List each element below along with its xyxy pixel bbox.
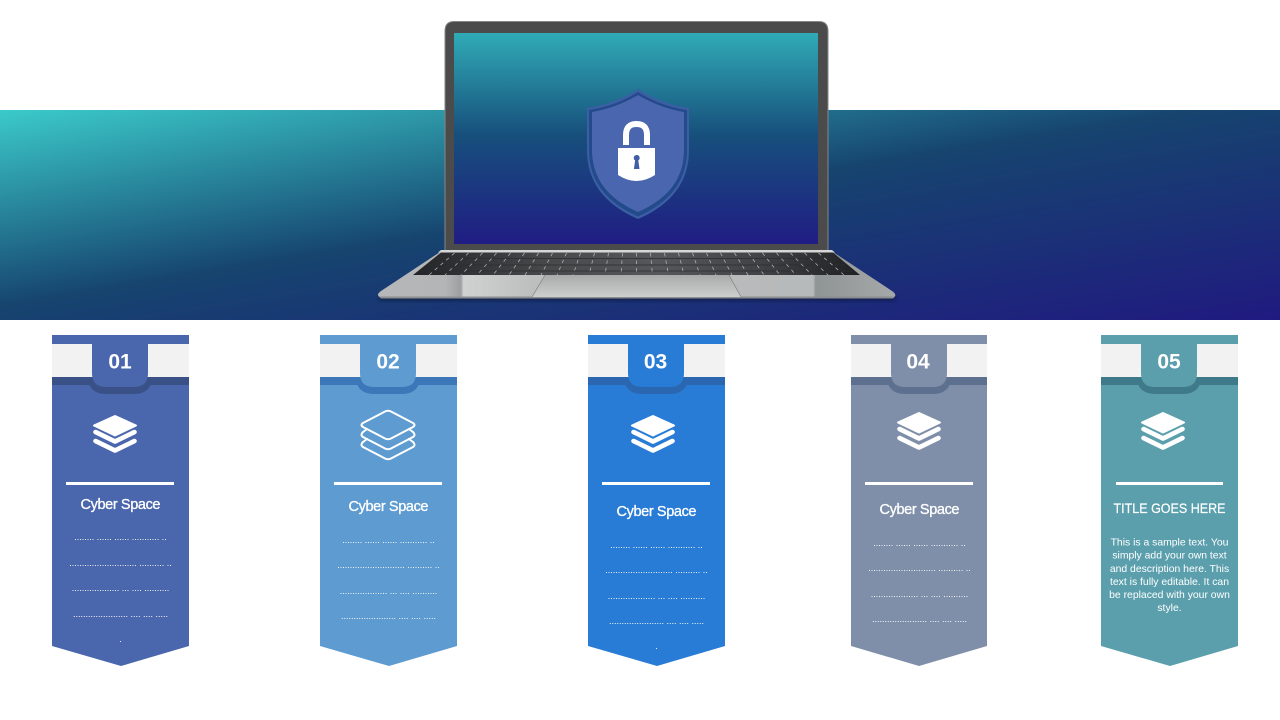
keyboard xyxy=(413,252,860,275)
body text: and description here. This xyxy=(1110,564,1229,575)
placeholder text: ........................... .......... .. xyxy=(605,565,708,575)
card title: TITLE GOES HERE xyxy=(1114,500,1226,516)
placeholder text: ...................... .... .... ..... xyxy=(872,614,967,624)
number 01: 01 xyxy=(108,350,132,374)
icon: layers outline xyxy=(362,411,414,459)
placeholder text xyxy=(868,538,971,624)
laptop lid xyxy=(445,22,828,251)
placeholder text: ........................... .......... .. xyxy=(69,558,172,568)
body text: be replaced with your own xyxy=(1109,590,1230,601)
placeholder text: ...................... .... .... ..... xyxy=(341,611,436,621)
placeholder text: ................... ... .... .......... xyxy=(340,586,437,596)
placeholder text: ................... ... .... .......... xyxy=(608,591,705,601)
placeholder text xyxy=(69,532,172,644)
number 02: 02 xyxy=(376,350,400,374)
placeholder text: ........................... .......... .. xyxy=(337,560,440,570)
placeholder text: . xyxy=(655,641,658,651)
placeholder text: ................... ... .... .......... xyxy=(871,589,968,599)
placeholder text: ........ ...... ...... ........... .. xyxy=(873,538,966,548)
laptop xyxy=(377,22,897,301)
placeholder text xyxy=(605,540,708,651)
card title: Cyber Space xyxy=(80,497,160,513)
card title: Cyber Space xyxy=(348,499,428,515)
placeholder text: ...................... .... .... ..... xyxy=(73,609,168,619)
placeholder text: ........ ...... ...... ........... .. xyxy=(74,532,167,542)
body text: style. xyxy=(1157,603,1182,614)
card title: Cyber Space xyxy=(880,502,960,518)
panel: card 05 xyxy=(1101,335,1238,666)
placeholder text: ...................... .... .... ..... xyxy=(609,616,704,626)
icon: layers xyxy=(1142,413,1184,448)
body text: This is a sample text. You xyxy=(1111,538,1229,548)
icon: layers xyxy=(898,413,940,448)
security shield xyxy=(587,89,689,219)
placeholder text: ................... ... .... .......... xyxy=(72,583,169,593)
number 04: 04 xyxy=(906,350,930,374)
placeholder text: ........................... .......... .. xyxy=(868,563,971,573)
number 05: 05 xyxy=(1157,350,1181,374)
icon: layers xyxy=(94,416,136,450)
body text: simply add your own text xyxy=(1112,550,1227,562)
banner xyxy=(0,110,1280,320)
laptop screen xyxy=(454,33,818,244)
body text xyxy=(1109,538,1230,614)
placeholder text: ........ ...... ...... ........... .. xyxy=(342,535,435,545)
card title: Cyber Space xyxy=(616,504,696,520)
placeholder text xyxy=(337,535,440,621)
panel: card 01 xyxy=(52,335,189,666)
body text: text is fully editable. It can xyxy=(1110,577,1229,588)
placeholder text: . xyxy=(119,634,122,644)
panel: card 02 xyxy=(320,335,457,666)
placeholder text: ........ ...... ...... ........... .. xyxy=(610,540,703,550)
number 03: 03 xyxy=(644,350,667,374)
panel: card 04 xyxy=(851,335,987,666)
icon: layers xyxy=(632,416,674,450)
laptop base xyxy=(377,250,897,301)
icon: padlock xyxy=(618,124,655,181)
panel: card 03 xyxy=(588,335,725,666)
